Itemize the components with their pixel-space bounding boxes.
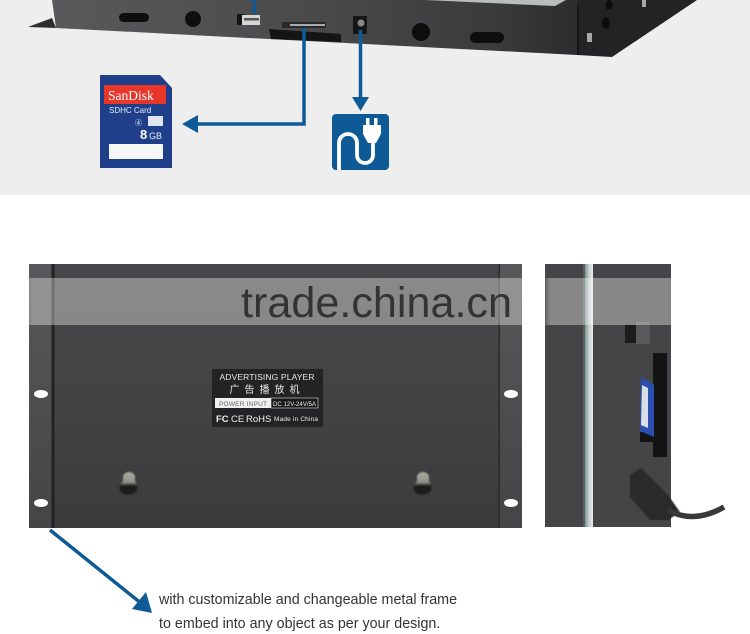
- icon: sd card: [100, 75, 172, 168]
- side usb plug: [630, 468, 680, 520]
- keyhole left: [120, 472, 137, 494]
- icon: sd card: ④: [135, 119, 142, 127]
- icon: sd card: GB: [149, 131, 162, 141]
- port: usb: [237, 14, 260, 25]
- icon: sd card: SanDisk: [108, 88, 154, 103]
- watermark text: trade.china.cn: [241, 279, 512, 327]
- device: bottom edge of the player with ports: [28, 0, 697, 57]
- caption text: with customizable and changeable metal frame: [158, 592, 457, 608]
- label plate: POWER INPUT: [219, 401, 267, 408]
- port: sd card slot: [269, 22, 341, 42]
- label plate: CE: [231, 414, 244, 425]
- mounting holes: [34, 390, 518, 507]
- keyhole right: [414, 472, 431, 494]
- watermark band: [27, 278, 674, 325]
- side usb port: [625, 322, 650, 344]
- label plate: [212, 369, 323, 427]
- port: dc power: [353, 16, 367, 34]
- arrow: usb: [253, 0, 256, 14]
- cable: [668, 507, 724, 516]
- label plate: DC 12V-24V/5A: [273, 402, 316, 408]
- arrow: diagonal to caption: [50, 530, 152, 613]
- icon: sd card: 8: [140, 127, 147, 142]
- caption text: to embed into any object as per your design.: [159, 616, 440, 632]
- panel: grey connector section background: [0, 0, 750, 195]
- label plate: 广告播放机: [230, 383, 304, 396]
- label plate: Made in China: [274, 416, 318, 423]
- arrow: power port to power icon: [352, 30, 369, 111]
- icon: sd card: SDHC Card: [109, 106, 151, 115]
- label plate: RoHS: [246, 414, 271, 425]
- panel: rear metal plate: [29, 264, 522, 528]
- side sd slot: [640, 353, 667, 457]
- label plate: ADVERTISING PLAYER: [220, 372, 314, 382]
- panel: side view of the player: [545, 264, 680, 527]
- arrow: sd slot to sd card: [182, 28, 304, 133]
- icon: power plug: [332, 114, 389, 170]
- label plate: FC: [216, 414, 229, 425]
- caption text: [158, 592, 457, 632]
